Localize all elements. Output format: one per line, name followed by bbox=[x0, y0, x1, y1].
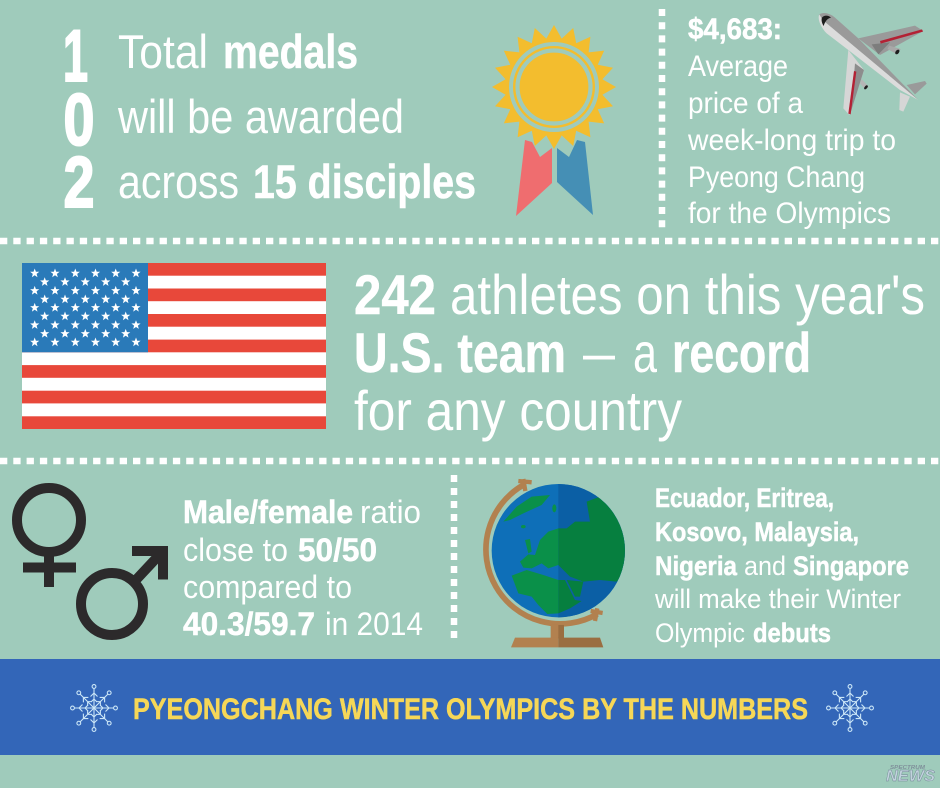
travel price text: price of a bbox=[688, 87, 803, 120]
medals text: will be awarded bbox=[117, 90, 404, 143]
gender ratio text: compared to bbox=[183, 569, 352, 605]
icon: right snowflake bbox=[827, 685, 873, 731]
big number 102: 0 bbox=[64, 80, 94, 161]
icon: gender symbols bbox=[17, 488, 163, 635]
debuts text bbox=[654, 483, 909, 648]
US team text: U.S. team bbox=[354, 321, 566, 384]
icon: medal bbox=[492, 25, 616, 216]
icon: airplane bbox=[819, 13, 927, 115]
gender ratio text: ratio bbox=[360, 494, 421, 530]
big number 102: 2 bbox=[64, 143, 94, 223]
gender ratio text: in 2014 bbox=[325, 606, 423, 642]
debuts text: and bbox=[744, 551, 786, 581]
logo: Spectrum News: SPECTRUM bbox=[890, 765, 925, 771]
debuts text: Olympic bbox=[655, 618, 745, 648]
icon: globe bbox=[486, 479, 630, 647]
medals text: 15 disciples bbox=[253, 155, 476, 208]
icon: left snowflake bbox=[71, 685, 117, 731]
medals text: Total bbox=[118, 25, 208, 78]
logo: Spectrum News: NEWS bbox=[886, 768, 935, 785]
debuts text: Nigeria bbox=[655, 551, 738, 581]
gender ratio text: 40.3/59.7 bbox=[183, 606, 315, 642]
travel price text bbox=[687, 13, 896, 230]
big number 102 bbox=[63, 16, 94, 223]
banner title: PYEONGCHANG WINTER OLYMPICS BY THE NUMBERS bbox=[133, 693, 808, 726]
gender ratio text: 50/50 bbox=[298, 532, 377, 568]
debuts text: debuts bbox=[753, 618, 831, 648]
big number 102: 1 bbox=[63, 16, 88, 97]
gender ratio text: Male/female bbox=[183, 494, 353, 530]
gender ratio text bbox=[183, 494, 423, 642]
debuts text: Ecuador, Eritrea, bbox=[655, 483, 834, 513]
medals text: across bbox=[118, 155, 239, 208]
US team text: — bbox=[583, 321, 615, 384]
US team text bbox=[354, 263, 925, 442]
debuts text: will make their Winter bbox=[654, 584, 901, 614]
travel price text: Pyeong Chang bbox=[688, 161, 865, 194]
travel price text: $4,683: bbox=[688, 13, 782, 46]
gender ratio text: close to bbox=[183, 532, 288, 568]
travel price text: Average bbox=[688, 50, 788, 83]
debuts text: Singapore bbox=[793, 551, 909, 581]
banner bbox=[0, 659, 940, 755]
icon: US flag bbox=[22, 263, 326, 429]
travel price text: week-long trip to bbox=[687, 124, 896, 157]
US team text: a bbox=[633, 321, 658, 384]
US team text: record bbox=[672, 321, 811, 384]
medals text bbox=[117, 25, 476, 208]
medals text: medals bbox=[223, 25, 358, 78]
travel price text: for the Olympics bbox=[688, 197, 891, 230]
US team text: 242 bbox=[354, 263, 436, 326]
US team text: for any country bbox=[354, 379, 682, 442]
debuts text: Kosovo, Malaysia, bbox=[655, 517, 859, 547]
